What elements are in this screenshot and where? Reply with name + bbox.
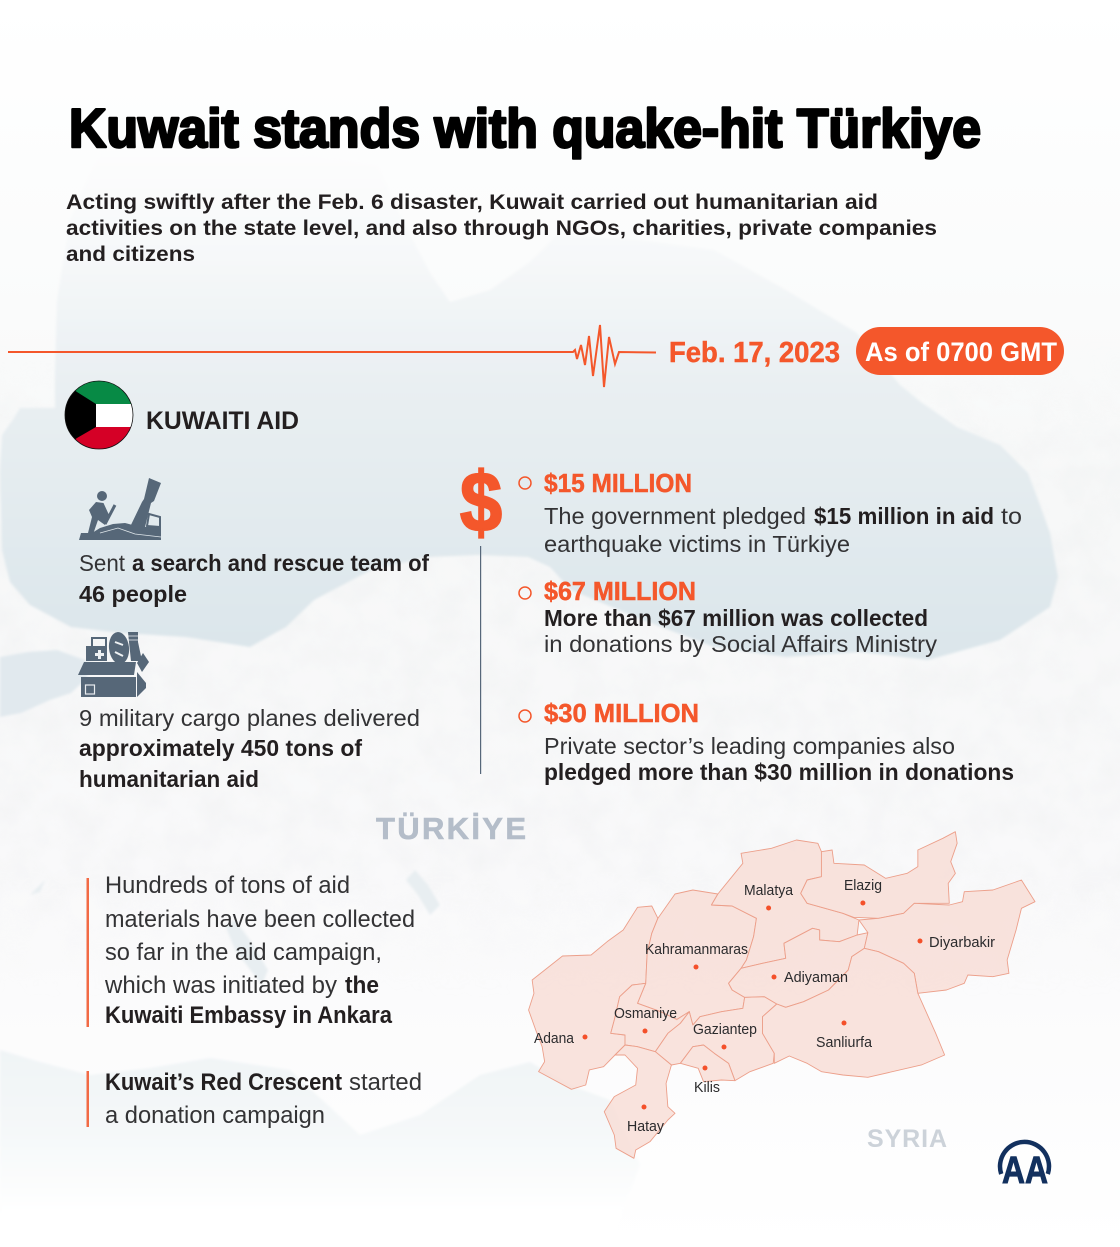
item: 15 million: earthquake victims in Türkiye: [544, 531, 850, 557]
subtitle text block: and citizens: [66, 243, 195, 266]
subtitle text block: activities on the state level, and also through NGOs, charities, private companies: [66, 217, 937, 240]
icon: dollar sign: $: [460, 455, 502, 549]
subtitle text block: [66, 191, 937, 266]
text: search and rescue team: Sent: [79, 550, 126, 576]
vertical divider: [480, 546, 481, 774]
icon: kuwait flag: [64, 380, 134, 450]
map labels and city dots: Diyarbakir: [929, 935, 995, 951]
callout: red crescent: [86, 1069, 422, 1129]
callout: aid campaign: the: [345, 972, 379, 999]
icon: search and rescue: [79, 478, 161, 540]
icon: aid box: [78, 631, 149, 697]
sea of marmara: [0, 650, 93, 717]
map labels and city dots: Adiyaman: [784, 970, 848, 986]
callout: aid campaign: materials have been collected: [105, 906, 415, 933]
map labels and city dots: Hatay: [627, 1119, 665, 1135]
item: 67 million: $67 MILLION: [544, 576, 696, 606]
map labels and city dots: Osmaniye: [614, 1006, 677, 1022]
item: 30 million: Private sector’s leading companies also: [544, 733, 955, 759]
seismic timeline line: [8, 325, 656, 387]
map labels and city dots: Gaziantep: [693, 1022, 757, 1038]
callout: red crescent: Kuwait’s Red Crescent: [105, 1069, 342, 1096]
map labels and city dots: Sanliurfa: [816, 1035, 873, 1051]
text: cargo planes: 9 military cargo planes delivered: [79, 705, 420, 731]
item: 15 million: $15 million in aid: [814, 503, 994, 529]
text: cargo planes: [79, 705, 420, 792]
logo: anadolu agency: AA: [1002, 1150, 1048, 1192]
item: 15 million: The government pledged: [544, 503, 806, 529]
item: 15 million: [519, 468, 1022, 557]
map labels and city dots: Elazig: [844, 878, 882, 894]
label: syria: SYRIA: [867, 1125, 947, 1153]
subtitle text block: Acting swiftly after the Feb. 6 disaster, Kuwait carried out humanitarian aid: [66, 191, 878, 214]
callout: aid campaign: Kuwaiti Embassy in Ankara: [105, 1002, 393, 1029]
date: Feb. 17, 2023: [669, 337, 840, 369]
lakes: [30, 870, 440, 985]
time badge: [856, 327, 1064, 375]
heading: kuwaiti aid: KUWAITI AID: [146, 407, 299, 435]
item: 67 million: in donations by Social Affairs Ministry: [544, 631, 938, 657]
text: search and rescue team: [79, 550, 429, 607]
item: 67 million: [519, 576, 938, 657]
callout: red crescent: started: [349, 1069, 422, 1096]
map labels and city dots: Kilis: [694, 1080, 720, 1096]
item: 30 million: pledged more than $30 million in donations: [544, 759, 1014, 785]
text: search and rescue team: a search and rescue team of: [132, 550, 429, 576]
title: Kuwait stands with quake-hit Türkiye: [69, 97, 981, 159]
text: search and rescue team: 46 people: [79, 581, 187, 607]
item: 15 million: $15 MILLION: [544, 468, 692, 498]
text: cargo planes: humanitarian aid: [79, 766, 259, 792]
map labels and city dots: [534, 878, 995, 1135]
callout: aid campaign: which was initiated by: [104, 972, 337, 999]
item: 15 million: to: [1001, 503, 1022, 529]
time badge: As of 0700 GMT: [865, 337, 1057, 367]
map: affected provinces: [529, 832, 1035, 1158]
item: 30 million: [519, 698, 1014, 785]
map labels and city dots: Malatya: [744, 883, 794, 899]
item: 30 million: $30 MILLION: [544, 698, 699, 728]
callout: red crescent: a donation campaign: [105, 1102, 325, 1129]
text: cargo planes: approximately 450 tons of: [79, 735, 362, 761]
background map: [0, 241, 1120, 1147]
map labels and city dots: Adana: [534, 1031, 575, 1047]
callout: aid campaign: Hundreds of tons of aid: [105, 872, 350, 899]
callout: aid campaign: so far in the aid campaign,: [105, 939, 382, 966]
callout: aid campaign: [86, 872, 415, 1029]
label: turkiye: TÜRKİYE: [376, 811, 526, 846]
item: 67 million: More than $67 million was collected: [544, 605, 928, 631]
mediterranean sea: [0, 1050, 640, 1247]
black sea: [0, 135, 1058, 660]
map labels and city dots: Kahramanmaras: [645, 942, 748, 958]
